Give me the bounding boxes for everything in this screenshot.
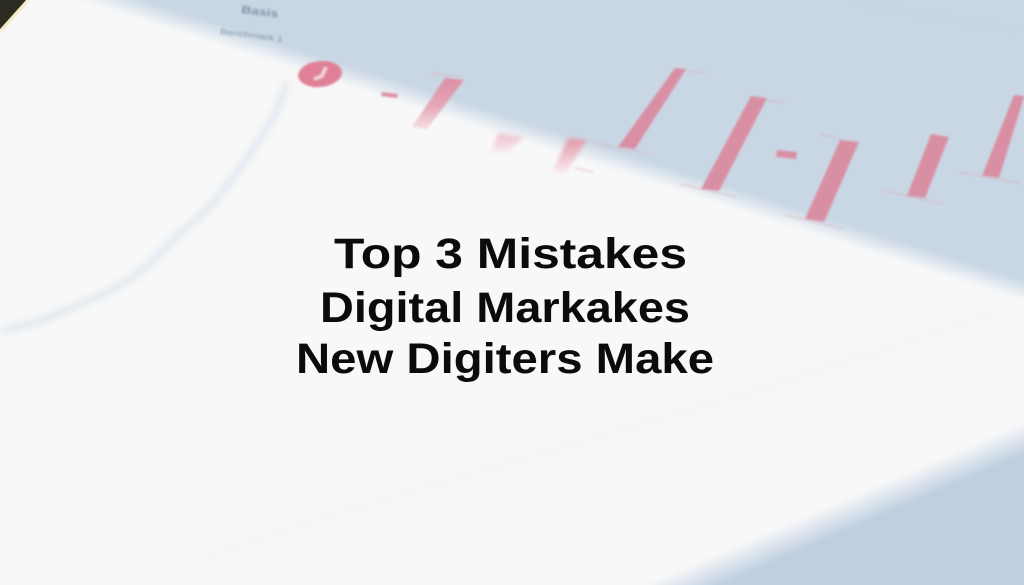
- blurred labels: Benchmark 1: [220, 27, 284, 44]
- title: New Digiters Make: [296, 335, 714, 383]
- blurred labels: [220, 4, 284, 44]
- title: Digital Markakes: [320, 284, 690, 332]
- blurred labels: Basis: [241, 4, 279, 20]
- title: Top 3 Mistakes: [334, 230, 687, 278]
- whiskers: [430, 71, 1020, 229]
- title: [296, 230, 714, 383]
- bars: [381, 68, 1024, 222]
- dark corner: [0, 0, 30, 34]
- faded bars: [491, 133, 587, 172]
- icon: pink badge: [297, 59, 343, 89]
- chart: blurred bars: [297, 59, 1024, 229]
